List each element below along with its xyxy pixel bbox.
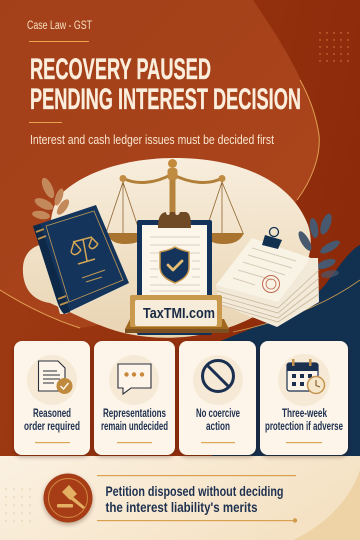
TaxTMI plaque: [125, 295, 229, 333]
takeaway text: Petition disposed without deciding: [106, 483, 284, 499]
paper stack: [216, 228, 319, 327]
panel: reasoned order: order required: [24, 421, 80, 433]
clipboard with shield: [137, 212, 212, 335]
leaves right: [296, 212, 342, 279]
takeaway rule bottom: [97, 518, 297, 523]
rule: [29, 41, 89, 42]
scales emblem: [71, 237, 98, 264]
navy wave: [212, 245, 360, 460]
rule: [29, 122, 62, 123]
panel: three-week protection: [260, 341, 348, 455]
cream blob: [23, 158, 311, 338]
takeaway text: [106, 483, 284, 515]
icon: calendar and clock: [287, 359, 324, 394]
footer corner arc: [293, 470, 360, 540]
panel: reasoned order: [14, 341, 90, 455]
gold line on wave: [233, 280, 360, 332]
panel: three-week protection: Three-week: [282, 408, 327, 420]
panel: representations: [94, 341, 175, 455]
dots decoration: [5, 488, 31, 522]
panel: no coercive action: No coercive: [196, 408, 240, 420]
leaves left: [31, 176, 71, 221]
panel: no coercive action: action: [206, 421, 230, 433]
TaxTMI plaque: TaxTMI.com: [143, 305, 215, 322]
law book: [33, 205, 129, 314]
title: [30, 53, 301, 116]
subtitle: Interest and cash ledger issues must be decided first: [30, 132, 274, 147]
title: RECOVERY PAUSED: [30, 53, 211, 86]
binder clip: [262, 228, 282, 249]
dots decoration: [319, 32, 349, 62]
panel: no coercive action: [179, 341, 256, 455]
footer background: [0, 456, 360, 540]
panel: reasoned order: Reasoned: [33, 408, 71, 420]
scales of justice: [106, 159, 244, 244]
shield icon: [160, 247, 189, 283]
takeaway text: the interest liability's merits: [106, 499, 258, 515]
icon: document check: [38, 361, 72, 394]
case law label: Case Law - GST: [27, 20, 92, 32]
icon: prohibition: [202, 360, 234, 392]
panel: representations: remain undecided: [101, 421, 168, 433]
panel: representations: Representations: [103, 408, 166, 420]
icon: gavel badge: [44, 474, 92, 522]
takeaway rule top: [97, 475, 296, 476]
icon: speech bubble: [118, 364, 151, 394]
